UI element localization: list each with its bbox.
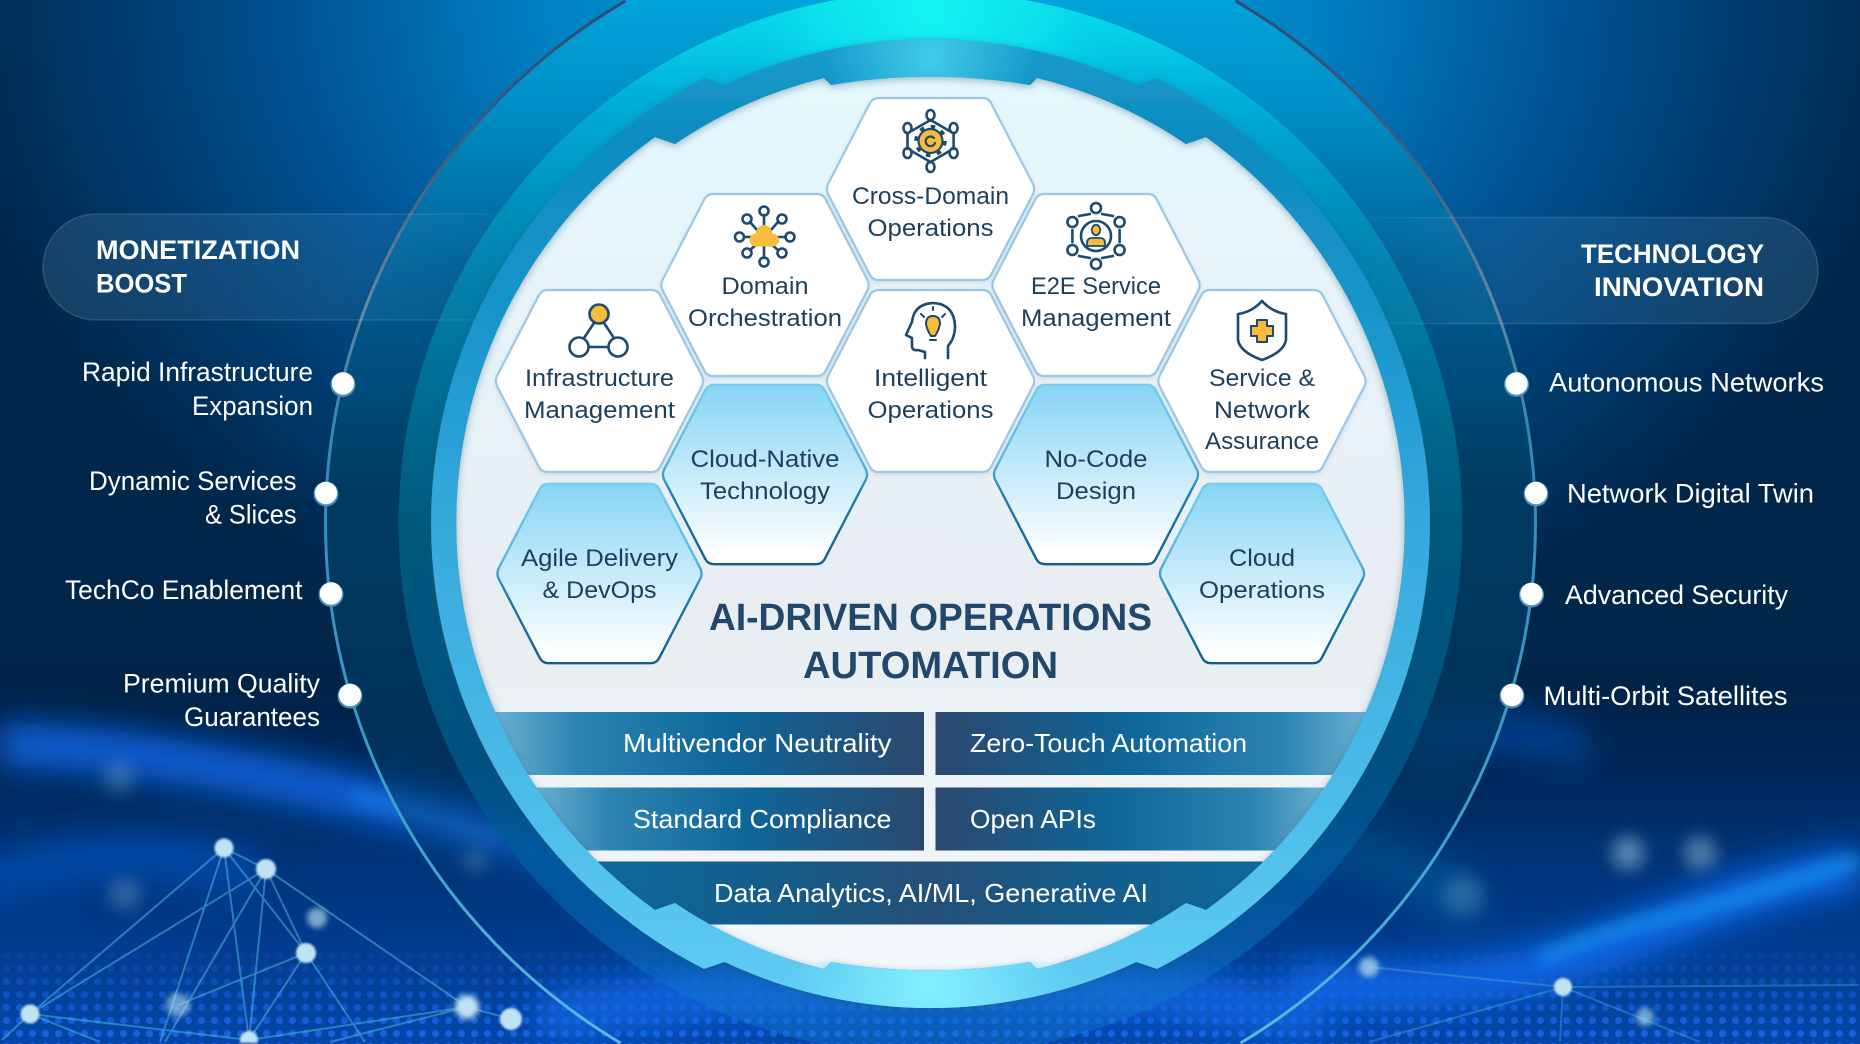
label: Service &	[1209, 365, 1315, 392]
label: Design	[1056, 478, 1136, 505]
label	[868, 365, 994, 424]
icon: gear network	[904, 110, 958, 172]
heading: monetization boost: BOOST	[96, 268, 187, 298]
item: techco enablement: TechCo Enablement	[65, 575, 303, 605]
label: Cloud-Native	[690, 446, 840, 473]
hexagon: no-code design	[994, 385, 1198, 564]
central white disc	[456, 77, 1405, 970]
bar: standard compliance	[530, 788, 924, 850]
item: autonomous networks: Autonomous Networks	[1549, 368, 1824, 398]
title	[709, 597, 1152, 687]
label: Operations	[868, 397, 994, 424]
hexagon: intelligent operations	[827, 290, 1034, 472]
label	[1021, 273, 1171, 332]
item: premium quality guarantees: Guarantees	[184, 702, 320, 732]
title: AI-DRIVEN OPERATIONS	[709, 597, 1152, 639]
hexagon: cloud operations	[1160, 484, 1364, 663]
label: & DevOps	[542, 577, 656, 604]
outer ring disc	[325, 0, 1536, 1044]
pill: technology innovation	[1318, 218, 1818, 324]
label: E2E Service	[1031, 273, 1161, 300]
network: left	[2, 848, 1858, 1042]
bar: open APIs	[936, 788, 1332, 850]
bar: data analytics: Data Analytics, AI/ML, Generative AI	[714, 878, 1148, 908]
hexagon: cloud-native technology	[663, 385, 867, 564]
bar: multivendor neutrality	[490, 712, 924, 775]
label: Technology	[700, 478, 830, 505]
bar: standard compliance: Standard Compliance	[633, 804, 892, 834]
label: Management	[1021, 305, 1171, 332]
heading: technology innovation: TECHNOLOGY	[1581, 239, 1764, 269]
hexagon: service and network assurance	[1158, 290, 1366, 472]
hexagon: cross-domain operations	[827, 98, 1034, 280]
item: multi-orbit satellites: Multi-Orbit Satellites	[1544, 681, 1788, 711]
item: dynamic services and slices: & Slices	[205, 500, 296, 530]
label: Assurance	[1205, 428, 1319, 455]
list: monetization items	[65, 357, 320, 732]
icon: cloud hub	[735, 206, 794, 266]
label: Management	[524, 397, 675, 424]
pill: monetization boost	[43, 214, 543, 320]
heading: technology innovation	[1581, 239, 1764, 302]
list: technology items	[1544, 368, 1824, 711]
outer thin ring line	[326, 1, 1535, 1043]
icon: triangle nodes	[570, 304, 628, 356]
label: Agile Delivery	[521, 545, 678, 572]
hexagon: agile delivery and devops	[497, 484, 702, 663]
label: Intelligent	[874, 365, 987, 392]
hexagon: infrastructure management	[496, 290, 703, 472]
heading: technology innovation: INNOVATION	[1594, 272, 1764, 302]
bar: zero-touch automation: Zero-Touch Automation	[970, 728, 1247, 758]
label: No-Code	[1044, 446, 1148, 473]
ring markers	[314, 372, 1548, 708]
label: Operations	[868, 215, 994, 242]
label	[1205, 365, 1319, 455]
item: network digital twin: Network Digital Twin	[1567, 478, 1814, 508]
bar: zero-touch automation	[936, 712, 1372, 775]
icon: head with bulb	[906, 303, 955, 358]
heading: monetization boost: MONETIZATION	[96, 235, 300, 265]
item: dynamic services and slices	[89, 466, 296, 530]
label: Domain	[722, 273, 808, 300]
label: Network	[1214, 397, 1311, 424]
icon: person network	[1067, 203, 1125, 269]
label	[521, 545, 678, 604]
label: Cross-Domain	[852, 183, 1009, 210]
item: rapid infrastructure expansion: Rapid Infrastructure	[82, 357, 313, 387]
label: Cloud	[1229, 545, 1295, 572]
item: premium quality guarantees	[123, 668, 320, 732]
icon: shield with cross	[1238, 301, 1286, 360]
hexagon: domain orchestration	[661, 194, 869, 376]
foundation bars	[490, 712, 1372, 924]
hexagon: E2E service management	[992, 194, 1200, 376]
item: advanced security: Advanced Security	[1565, 580, 1788, 610]
label	[852, 183, 1009, 242]
label: Operations	[1199, 577, 1325, 604]
item: premium quality guarantees: Premium Quality	[123, 668, 320, 698]
item: rapid infrastructure expansion	[82, 357, 313, 421]
item: dynamic services and slices: Dynamic Services	[89, 466, 296, 496]
halftone dots	[3, 952, 1856, 1044]
item: rapid infrastructure expansion: Expansion	[192, 391, 313, 421]
heading: monetization boost	[96, 235, 300, 298]
network nodes and bokeh	[20, 762, 1717, 1043]
title: AUTOMATION	[803, 645, 1058, 687]
label	[690, 446, 840, 505]
label	[1044, 446, 1148, 505]
wave: left bright band	[0, 730, 1860, 1015]
label	[1199, 545, 1325, 604]
label: Infrastructure	[525, 365, 674, 392]
label: Orchestration	[688, 305, 842, 332]
bar: multivendor neutrality: Multivendor Neutrality	[623, 728, 892, 758]
bar: open APIs: Open APIs	[970, 804, 1096, 834]
label	[524, 365, 675, 424]
inner ring disc	[398, 0, 1462, 1044]
stepped blue band	[431, 39, 1430, 1008]
label	[688, 273, 842, 332]
bar: data analytics	[590, 862, 1271, 924]
